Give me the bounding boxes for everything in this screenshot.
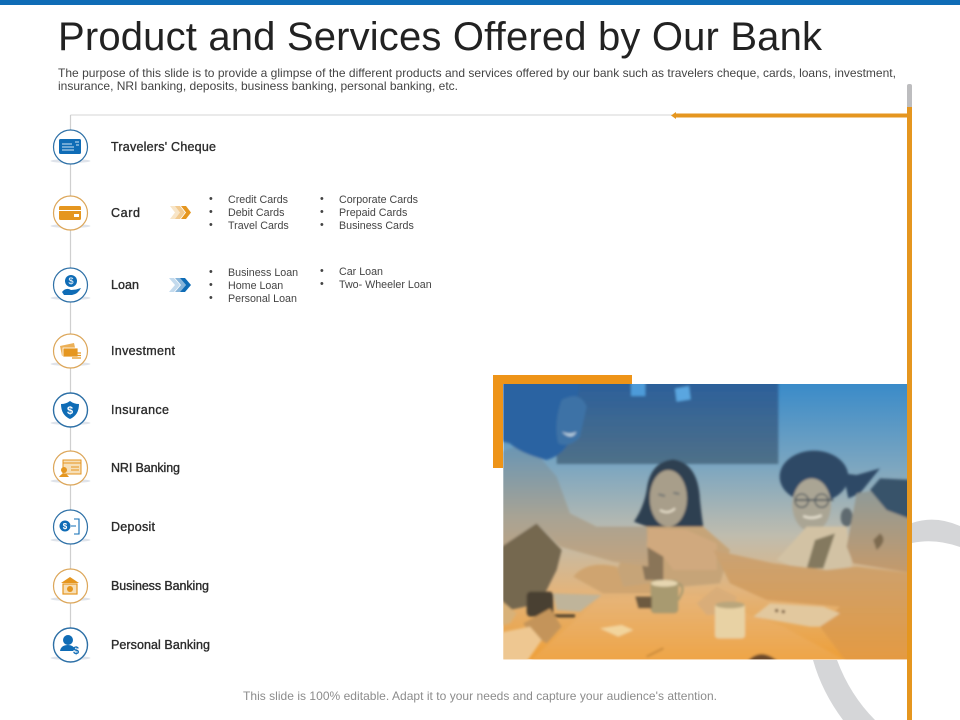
item: NRI Banking: NRI Banking: [111, 461, 180, 475]
list: card types: Credit Cards: [228, 194, 288, 206]
list: card types: Prepaid Cards: [339, 207, 407, 219]
list: loan types: Business Loan: [228, 267, 298, 279]
icon: bank building: [61, 577, 79, 594]
icon: coin into slot: $: [63, 522, 68, 531]
list: loan types: [209, 265, 432, 305]
item: Loan: [50, 265, 432, 305]
icon: person with dollar: $: [73, 645, 79, 657]
item: Travelers' Cheque: [50, 130, 216, 164]
list: loan types: •: [209, 266, 213, 278]
item: Insurance: [50, 393, 169, 427]
intro text: [58, 66, 896, 93]
icon: coin over hand: [62, 275, 81, 295]
item: Investment: [50, 334, 176, 368]
item: Business Banking: Business Banking: [111, 579, 209, 593]
list: loan types: •: [209, 292, 213, 304]
icon: person with dollar: [60, 635, 79, 657]
list: loan types: Home Loan: [228, 280, 283, 292]
item: Card: Card: [111, 206, 140, 220]
list: card types: •: [209, 219, 213, 231]
list: card types: •: [209, 193, 213, 205]
item: Card: [50, 193, 418, 232]
list: card types: Debit Cards: [228, 207, 284, 219]
list: loan types: •: [320, 278, 324, 290]
icon: coin over hand: $: [68, 276, 74, 286]
item: Deposit: [50, 510, 156, 544]
list: loan types: •: [209, 279, 213, 291]
item: Insurance: Insurance: [111, 403, 169, 417]
list: card types: •: [320, 206, 324, 218]
title: Product and Services Offered by Our Bank: [58, 15, 823, 59]
list: loan types: Two- Wheeler Loan: [339, 279, 432, 291]
list: loan types: Personal Loan: [228, 293, 297, 305]
list: loan types: Car Loan: [339, 266, 383, 278]
frame lines and arrow: [70, 84, 912, 720]
list: card types: Travel Cards: [228, 220, 289, 232]
item: Personal Banking: Personal Banking: [111, 638, 210, 652]
icon: person with card: [59, 460, 81, 477]
list: card types: •: [209, 206, 213, 218]
icon: credit card: [59, 206, 81, 220]
icon: cheque: [59, 139, 81, 154]
icon: shield: $: [67, 405, 73, 417]
item: Investment: Investment: [111, 344, 176, 358]
photo: team handshake: [497, 380, 913, 667]
list: card types: •: [320, 193, 324, 205]
list: card types: •: [320, 219, 324, 231]
footer note: This slide is 100% editable. Adapt it to your needs and capture your audience's attention.: [243, 689, 717, 703]
list: loan types: •: [320, 265, 324, 277]
orange photo accent: [493, 375, 632, 468]
timeline spine: [70, 115, 72, 628]
icon: banknotes: [60, 343, 81, 358]
item: Business Banking: [50, 569, 209, 603]
arrow: blue chevrons: [169, 278, 191, 292]
item: NRI Banking: [50, 451, 180, 485]
list: card types: Corporate Cards: [339, 194, 418, 206]
intro text: The purpose of this slide is to provide a glimpse of the different products and services offered by our bank such as travelers cheque, cards, loans, investment,: [58, 66, 896, 80]
arrow: orange chevrons: [170, 206, 191, 219]
item: Deposit: Deposit: [111, 520, 156, 534]
item: Travelers' Cheque: Travelers' Cheque: [111, 140, 216, 154]
intro text: insurance, NRI banking, deposits, business banking, personal banking, etc.: [58, 79, 458, 93]
top accent bar: [0, 0, 960, 5]
background ring: [813, 520, 960, 720]
item: Personal Banking: [50, 628, 210, 662]
item: Loan: Loan: [111, 278, 139, 292]
list: card types: [209, 193, 418, 232]
list: card types: Business Cards: [339, 220, 414, 232]
